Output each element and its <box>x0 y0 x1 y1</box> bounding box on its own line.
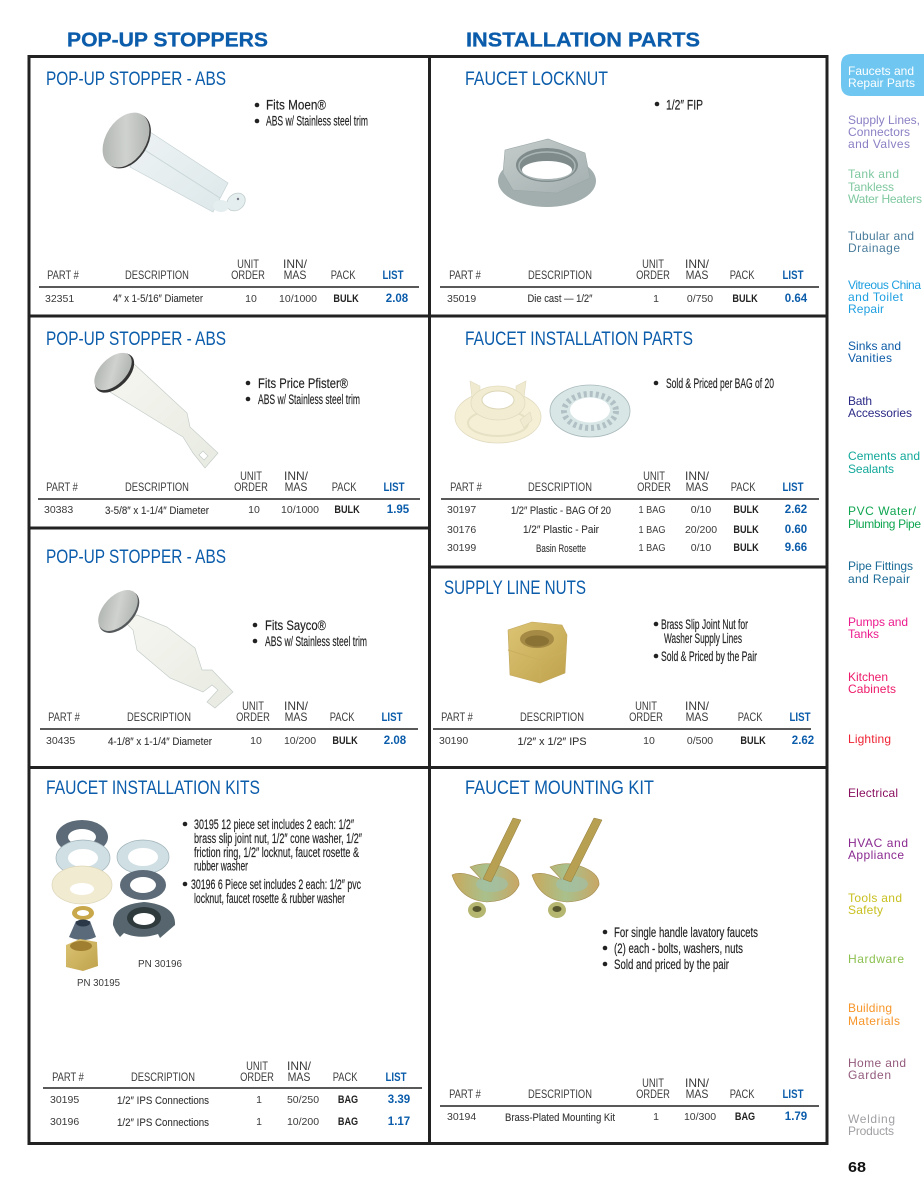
parts table: MAS <box>285 711 308 724</box>
parts table: BULK <box>740 735 766 747</box>
parts table: 10/1000 <box>281 504 319 516</box>
category: building materials: Building <box>848 1001 892 1015</box>
parts table: 30435 <box>46 735 75 747</box>
category: sinks and vanities: Vanities <box>848 351 892 365</box>
parts table: PART # <box>449 269 481 282</box>
category: hvac and appliance: Appliance <box>848 848 904 862</box>
parts table: UNIT <box>642 258 664 271</box>
parts table: BULK <box>733 542 759 554</box>
parts table: DESCRIPTION <box>125 269 189 282</box>
parts table: 1 BAG <box>639 524 665 536</box>
parts table: 1.79 <box>785 1111 807 1123</box>
parts table: ORDER <box>629 711 663 724</box>
parts table: BULK <box>733 504 759 516</box>
category: lighting: Lighting <box>848 732 891 746</box>
parts table: BAG <box>338 1094 358 1106</box>
parts table: PACK <box>738 711 763 724</box>
icon: mounting bolt set one <box>452 818 521 918</box>
category: water heaters: Tankless <box>848 180 894 194</box>
parts table: ORDER <box>234 481 268 494</box>
category: bath accessories: Accessories <box>848 406 912 420</box>
panel: faucet locknut <box>440 69 819 305</box>
parts table: BULK <box>333 293 359 305</box>
bullet list: ABS w/ Stainless steel trim <box>258 392 360 407</box>
icon: PN 30195 parts stack <box>52 820 112 971</box>
icon: PN 30196 parts stack <box>113 840 175 938</box>
panel: pop-up stopper price pfister <box>38 329 420 517</box>
category: building materials: Materials <box>848 1014 900 1028</box>
parts table: Die cast — 1/2″ <box>528 293 593 305</box>
parts table: PART # <box>48 711 80 724</box>
parts table: PACK <box>730 269 755 282</box>
parts table: 1/2″ x 1/2″ IPS <box>518 736 586 748</box>
category: pvc pipe: PVC Water/ <box>848 504 917 518</box>
parts table: 0.64 <box>785 293 808 305</box>
panel: pop-up stopper moen <box>39 69 419 305</box>
parts table: UNIT <box>642 1077 664 1090</box>
parts table: 1 <box>653 293 659 305</box>
parts table: PART # <box>52 1071 84 1084</box>
parts table: LIST <box>782 482 804 494</box>
bullet list: friction ring, 1/2″ locknut, faucet rosette & <box>194 845 359 860</box>
category: vitreous china: Repair <box>848 302 884 316</box>
parts table: 35019 <box>447 293 476 305</box>
parts table: BULK <box>733 524 759 536</box>
category: water heaters <box>848 167 922 206</box>
parts table: ORDER <box>637 481 671 494</box>
parts table: 10 <box>245 293 257 305</box>
category: kitchen cabinets: Kitchen <box>848 670 888 684</box>
parts table: MAS <box>686 711 709 724</box>
parts table: DESCRIPTION <box>520 711 584 724</box>
bullet list: locknut, faucet rosette & rubber washer <box>194 891 345 906</box>
panel title: FAUCET LOCKNUT <box>465 69 608 90</box>
parts table: 0/500 <box>687 735 713 747</box>
bullet list: Fits Moen® <box>266 98 326 112</box>
parts table: 2.08 <box>384 735 407 747</box>
panel: faucet installation parts <box>441 329 819 555</box>
bullet list: For single handle lavatory faucets <box>614 925 758 940</box>
parts table: 0/750 <box>687 293 713 305</box>
bullet list: 30195 12 piece set includes 2 each: 1/2″ <box>194 817 354 832</box>
category: pvc pipe: Plumbing Pipe <box>848 517 921 531</box>
parts table: MAS <box>284 269 307 282</box>
category: welding products: Products <box>848 1124 894 1138</box>
parts table: 30190 <box>439 735 468 747</box>
icon: stopper with square hole tail <box>88 346 218 468</box>
parts table: PACK <box>332 481 357 494</box>
category: sinks and vanities: Sinks and <box>848 339 901 353</box>
category: cements and sealants: Cements and <box>848 449 920 463</box>
parts table: 2.62 <box>785 504 807 516</box>
parts table: PART # <box>441 711 473 724</box>
parts table: DESCRIPTION <box>528 1088 592 1101</box>
category: vitreous china: and Toilet <box>848 290 904 304</box>
category: hardware: Hardware <box>848 952 904 966</box>
panel: faucet installation kits <box>43 778 422 1129</box>
parts table: Brass-Plated Mounting Kit <box>505 1112 615 1124</box>
category: pumps and tanks <box>848 615 908 641</box>
panel: faucet mounting kit <box>440 778 819 1124</box>
parts table: PACK <box>330 711 355 724</box>
category: supply lines <box>848 113 920 151</box>
category: tubular and drainage: Tubular and <box>848 229 914 243</box>
parts table: PART # <box>47 269 79 282</box>
category: bath accessories <box>848 394 912 420</box>
icon: mounting bolt set two <box>532 818 602 918</box>
category: supply lines: Connectors <box>848 125 910 139</box>
category: tubular and drainage: Drainage <box>848 241 900 255</box>
category: sinks and vanities <box>848 339 901 365</box>
parts table: INN/ <box>685 469 710 483</box>
parts table: MAS <box>285 481 308 494</box>
panel title: SUPPLY LINE NUTS <box>444 578 586 599</box>
icon: brass hex nut <box>508 622 567 683</box>
parts table: LIST <box>782 270 804 282</box>
parts table: 1 BAG <box>639 542 665 554</box>
category: tools and safety: Tools and <box>848 891 902 905</box>
parts table: PACK <box>731 481 756 494</box>
parts table: ORDER <box>636 269 670 282</box>
bullet list: ABS w/ Stainless steel trim <box>265 634 367 649</box>
bullet list <box>603 925 758 972</box>
category: supply lines: Supply Lines, <box>848 113 920 127</box>
category: bath accessories: Bath <box>848 394 872 408</box>
bullet list <box>654 617 757 664</box>
parts table: 1 BAG <box>639 504 665 516</box>
bullet list: Sold and priced by the pair <box>614 957 729 972</box>
bullet list: Washer Supply Lines <box>664 631 742 646</box>
category: electrical: Electrical <box>848 786 898 800</box>
bullet list <box>255 98 368 128</box>
bullet list: Fits Sayco® <box>265 618 326 633</box>
parts table: 0/10 <box>691 504 711 516</box>
parts table: MAS <box>686 481 709 494</box>
panel title: POP-UP STOPPER - ABS <box>46 547 226 568</box>
parts table: LIST <box>382 270 404 282</box>
icon: plastic locknut <box>455 381 541 443</box>
bullet list <box>253 618 367 649</box>
parts table: 10 <box>250 735 262 747</box>
parts table: UNIT <box>246 1060 268 1073</box>
bullet list <box>183 817 362 906</box>
icon: toothed washer <box>550 385 630 437</box>
parts table: MAS <box>686 1088 709 1101</box>
parts table: 10 <box>643 735 655 747</box>
bullet list: Fits Price Pfister® <box>258 376 348 391</box>
parts table: LIST <box>790 712 810 724</box>
category: pipe fittings: Pipe Fittings <box>848 559 913 573</box>
parts table: 1 <box>256 1116 262 1128</box>
parts table: PART # <box>46 481 78 494</box>
parts table: UNIT <box>240 470 262 483</box>
category: tools and safety <box>848 891 902 917</box>
sidebar: category navigation <box>841 54 924 1138</box>
category: building materials <box>848 1001 900 1028</box>
parts table: DESCRIPTION <box>131 1071 195 1084</box>
parts table: UNIT <box>635 700 657 713</box>
parts table <box>440 1076 819 1124</box>
category: vitreous china: Vitreous China <box>848 278 921 292</box>
parts table: 30383 <box>44 504 73 516</box>
parts table: 32351 <box>45 293 74 305</box>
panel: pop-up stopper sayco <box>40 547 418 748</box>
parts table <box>39 257 419 305</box>
bullet list: Sold & Priced per BAG of 20 <box>666 376 774 391</box>
parts table: Basin Rosette <box>536 543 586 555</box>
category: tools and safety: Safety <box>848 903 883 917</box>
panel title: FAUCET INSTALLATION KITS <box>46 778 260 799</box>
parts table <box>40 699 418 748</box>
parts table: ORDER <box>240 1071 274 1084</box>
parts table: 3.39 <box>388 1094 410 1106</box>
parts table: MAS <box>288 1071 311 1084</box>
icon: stopper with round tail <box>93 104 249 215</box>
parts table: INN/ <box>685 699 710 713</box>
parts table: 10/200 <box>284 735 316 747</box>
parts table: 4-1/8″ x 1-1/4″ Diameter <box>108 736 212 748</box>
category: cements and sealants: Sealants <box>848 462 894 476</box>
parts table: DESCRIPTION <box>528 481 592 494</box>
category: pvc pipe <box>848 504 921 531</box>
category: hvac and appliance <box>848 836 908 862</box>
parts table: DESCRIPTION <box>528 269 592 282</box>
bullet list: 30196 6 Piece set includes 2 each: 1/2″ pvc <box>191 877 361 892</box>
category: pumps and tanks: Pumps and <box>848 615 908 629</box>
parts table: 30199 <box>447 542 476 554</box>
parts table: 30176 <box>447 524 476 536</box>
parts table: PACK <box>333 1071 358 1084</box>
parts table: 30194 <box>447 1111 476 1123</box>
parts table: 2.08 <box>386 293 409 305</box>
parts table: 0/10 <box>691 542 711 554</box>
active tab: faucets and repair parts: Faucets and <box>848 64 914 78</box>
bullet list <box>246 376 360 407</box>
category: kitchen cabinets <box>848 670 896 696</box>
product grid frame <box>29 56 827 1144</box>
parts table: LIST <box>782 1089 804 1101</box>
category: vitreous china <box>848 278 921 316</box>
parts table: BAG <box>735 1111 755 1123</box>
parts table: LIST <box>384 482 404 494</box>
parts table: 10/300 <box>684 1111 716 1123</box>
category: home and garden: Garden <box>848 1068 891 1082</box>
bullet list: brass slip joint nut, 1/2″ cone washer, 1/2″ <box>194 831 362 846</box>
category: kitchen cabinets: Cabinets <box>848 682 896 696</box>
category: hvac and appliance: HVAC and <box>848 836 908 850</box>
parts table: 1.95 <box>387 504 410 516</box>
parts table: 50/250 <box>287 1094 319 1106</box>
parts table: UNIT <box>643 470 665 483</box>
parts table: UNIT <box>242 700 264 713</box>
parts table: INN/ <box>685 257 710 271</box>
active tab: faucets and repair parts <box>841 54 924 96</box>
parts table: 2.62 <box>792 735 814 747</box>
category: welding products: Welding <box>848 1112 895 1126</box>
bullet list <box>654 376 774 391</box>
parts table: 10/200 <box>287 1116 319 1128</box>
bullet list: 1/2″ FIP <box>666 98 703 112</box>
panel title: FAUCET INSTALLATION PARTS <box>465 329 693 350</box>
parts table: MAS <box>686 269 709 282</box>
caption: PN 30195: PN 30195 <box>77 977 120 989</box>
parts table: ORDER <box>236 711 270 724</box>
parts table: DESCRIPTION <box>125 481 189 494</box>
category: cements and sealants <box>848 449 920 476</box>
parts table: 1/2″ Plastic - Pair <box>523 524 599 536</box>
parts table: BULK <box>334 504 360 516</box>
category: tubular and drainage <box>848 229 914 255</box>
active tab: faucets and repair parts: Repair Parts <box>848 76 915 90</box>
parts table: 20/200 <box>685 524 717 536</box>
parts table: 0.60 <box>785 524 807 536</box>
category: supply lines: and Valves <box>848 137 910 151</box>
parts table: ORDER <box>231 269 265 282</box>
parts table: 10/1000 <box>279 293 317 305</box>
parts table: 10 <box>248 504 260 516</box>
parts table: 30197 <box>447 504 476 516</box>
parts table <box>440 257 819 305</box>
parts table: INN/ <box>287 1059 312 1073</box>
parts table: 1.17 <box>388 1116 410 1128</box>
parts table: BULK <box>332 735 358 747</box>
parts table: INN/ <box>283 257 308 271</box>
parts table: BAG <box>338 1116 358 1128</box>
category: home and garden: Home and <box>848 1056 906 1070</box>
icon: hex locknut <box>498 139 596 207</box>
category: pumps and tanks: Tanks <box>848 627 879 641</box>
panel title: POP-UP STOPPER - ABS <box>46 69 226 90</box>
parts table: 1/2″ IPS Connections <box>117 1117 209 1129</box>
category: water heaters: Water Heaters <box>848 192 922 206</box>
panel title: POP-UP STOPPER - ABS <box>46 329 226 350</box>
parts table: LIST <box>386 1072 406 1084</box>
parts table: 30196 <box>50 1116 79 1128</box>
heading: pop-up stoppers: POP-UP STOPPERS <box>67 28 268 52</box>
parts table: 30195 <box>50 1094 79 1106</box>
parts table: ORDER <box>636 1088 670 1101</box>
parts table: 1/2″ Plastic - BAG Of 20 <box>511 505 611 517</box>
category: pipe fittings: and Repair <box>848 572 910 586</box>
bullet list: rubber washer <box>194 858 248 874</box>
category: pipe fittings <box>848 559 913 586</box>
parts table: PART # <box>449 1088 481 1101</box>
parts table <box>43 1059 422 1129</box>
bullet list: ABS w/ Stainless steel trim <box>266 114 368 128</box>
parts table: 1 <box>653 1111 659 1123</box>
category: welding products <box>848 1112 895 1138</box>
parts table: PACK <box>730 1088 755 1101</box>
parts table <box>433 699 814 748</box>
parts table: UNIT <box>237 258 259 271</box>
parts table: PACK <box>331 269 356 282</box>
parts table: INN/ <box>685 1076 710 1090</box>
parts table: 1 <box>256 1094 262 1106</box>
parts table: BULK <box>732 293 758 305</box>
bullet list: (2) each - bolts, washers, nuts <box>614 941 743 956</box>
parts table: 4″ x 1-5/16″ Diameter <box>113 293 203 305</box>
category: home and garden <box>848 1056 906 1082</box>
parts table: 9.66 <box>785 542 807 554</box>
caption: PN 30196: PN 30196 <box>138 958 182 970</box>
category: water heaters: Tank and <box>848 167 899 181</box>
panel: supply line nuts <box>433 578 814 748</box>
bullet list: Sold & Priced by the Pair <box>661 649 757 664</box>
heading: installation parts: INSTALLATION PARTS <box>466 28 700 52</box>
bullet list: Brass Slip Joint Nut for <box>661 617 748 632</box>
parts table: INN/ <box>284 469 309 483</box>
icon: stopper with hook tail <box>91 583 233 708</box>
parts table <box>441 469 819 555</box>
parts table: INN/ <box>284 699 309 713</box>
bullet list <box>655 98 703 112</box>
parts table: DESCRIPTION <box>127 711 191 724</box>
parts table: 3-5/8″ x 1-1/4″ Diameter <box>105 505 209 517</box>
parts table: 1/2″ IPS Connections <box>117 1095 209 1107</box>
parts table: PART # <box>450 481 482 494</box>
panel title: FAUCET MOUNTING KIT <box>465 778 654 799</box>
parts table <box>38 469 420 517</box>
parts table: LIST <box>382 712 402 724</box>
page number: 68 <box>848 1159 866 1176</box>
